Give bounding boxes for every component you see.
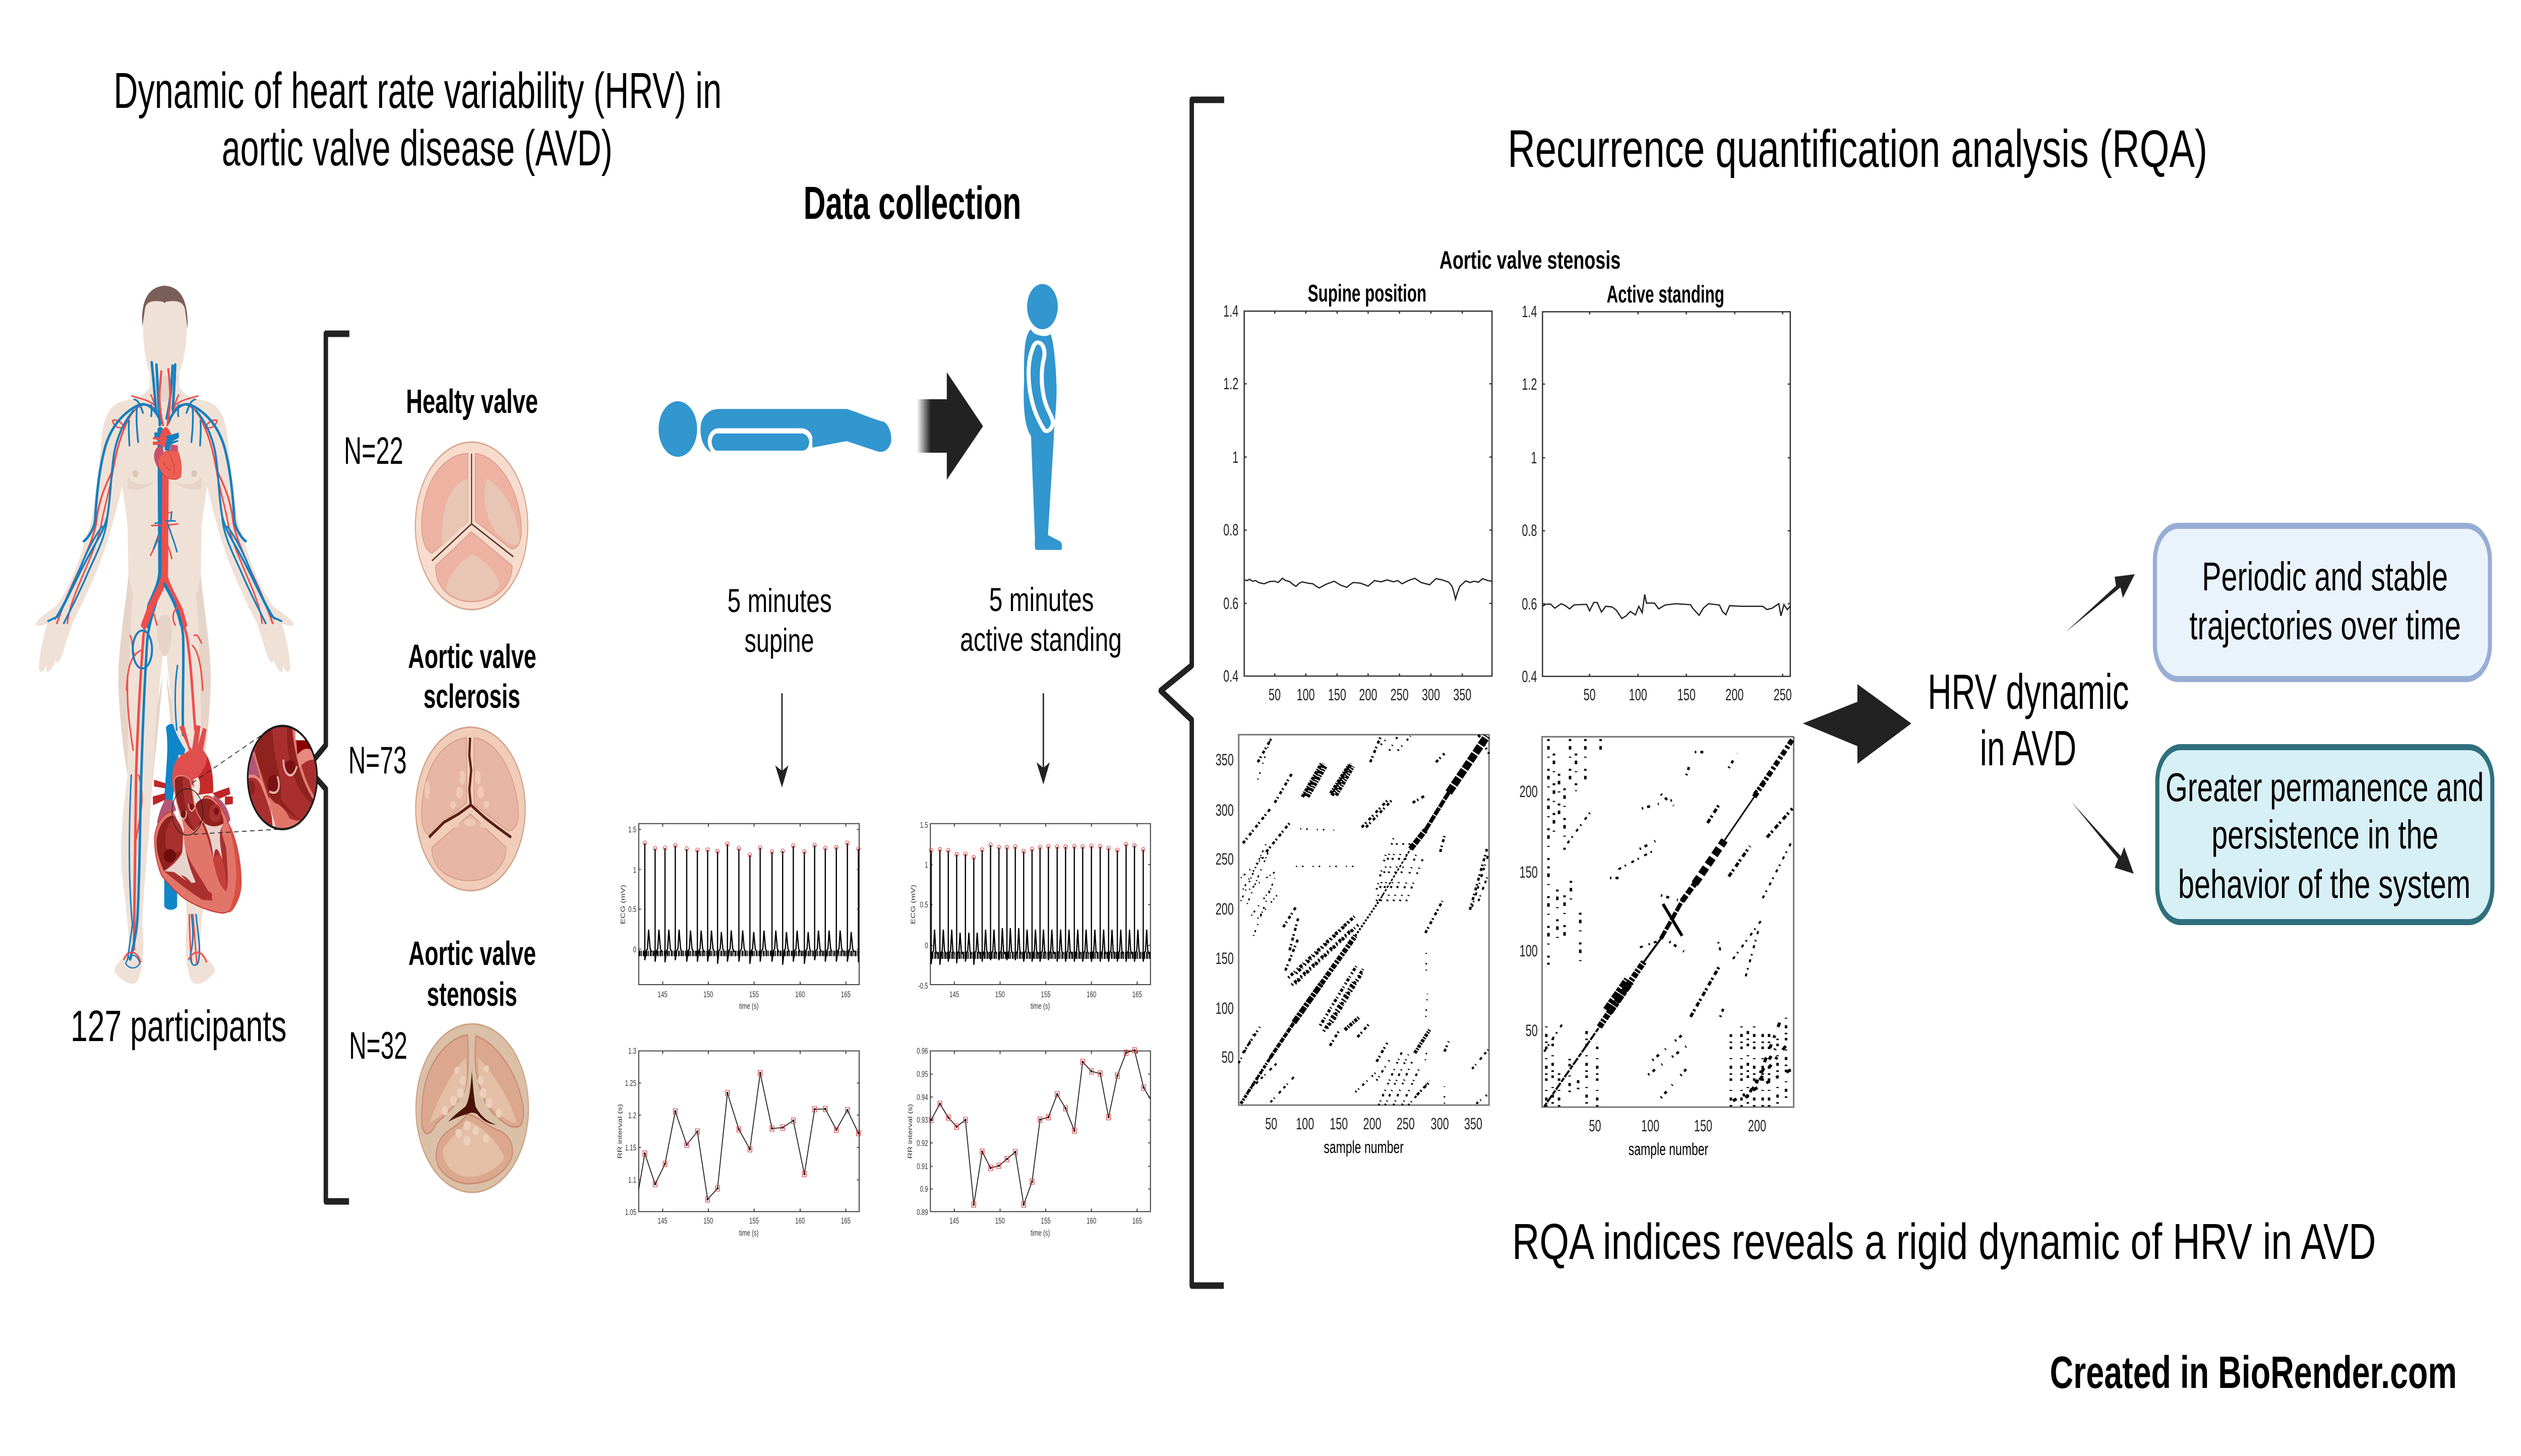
icon: standing person (1024, 284, 1062, 550)
chart: RR time series, active standing: 1 (1531, 449, 1537, 467)
icon: healthy valve (415, 442, 528, 610)
chart: RR time series, supine (1223, 302, 1492, 704)
chart: recurrence plot, active standing: sample number (1629, 1140, 1708, 1159)
chart: recurrence plot, active standing: 50 (1589, 1117, 1601, 1135)
arrow: supine to standing (917, 372, 983, 480)
chart: RR interval active standing: 0.89 (917, 1208, 928, 1218)
chart: RR time series, supine: 200 (1359, 686, 1377, 704)
chart: RR interval active standing: RR interval (s) (907, 1104, 914, 1159)
icon: aortic valve magnified view (247, 724, 319, 832)
chart: RR time series, active standing: 100 (1629, 686, 1647, 704)
label: 5 minutes supine (728, 582, 832, 659)
chart: recurrence plot, active standing: 100 (1520, 942, 1538, 960)
illustration: sectioned heart (153, 724, 280, 913)
chart: recurrence plot, supine: 350 (1464, 1115, 1482, 1133)
heading: healthy valve: Healty valve (406, 383, 538, 420)
chart: ECG active standing: 1 (925, 861, 928, 870)
chart: RR interval supine: 150 (703, 1217, 713, 1226)
chart: RR interval supine: 160 (795, 1217, 805, 1226)
chart: recurrence plot, supine (1216, 735, 1489, 1157)
chart: RR interval supine: 1.2 (628, 1111, 636, 1121)
heading: active standing: Active standing (1606, 281, 1724, 308)
icon: small heart in chest (153, 427, 182, 479)
chart: ECG active standing: 1.5 (920, 821, 928, 830)
label: HRV dynamic in AVD (1928, 664, 2129, 776)
leg vessels (124, 576, 206, 968)
title: dynamic of HRV in AVD: Dynamic of heart rate variability (HRV) in (113, 63, 722, 119)
arrow: RQA to HRV dynamic (1803, 684, 1911, 764)
chart: recurrence plot, supine: 100 (1296, 1115, 1314, 1133)
chart: recurrence plot, supine: 300 (1431, 1115, 1449, 1133)
arrow: to periodic trajectories (2066, 574, 2135, 632)
chart: ECG active standing: 165 (1132, 990, 1142, 1000)
vessels: upper body arteries and veins (48, 362, 281, 625)
chart: RR interval active standing: 0.93 (917, 1116, 928, 1125)
chart: RR interval active standing: 0.96 (917, 1047, 928, 1056)
label: N=73: N=73 (348, 739, 407, 781)
label: 5 minutes active standing: 5 minutes (989, 581, 1094, 618)
panel: greater permanence and persistence: Greater permanence and (2166, 765, 2484, 810)
heading: supine position: Supine position (1308, 280, 1426, 307)
label: 5 minutes active standing: active standing (960, 621, 1122, 658)
heading: aortic valve stenosis (408, 935, 536, 1013)
arrow: supine down to ECG (775, 693, 789, 787)
chart: recurrence plot, active standing: 200 (1520, 782, 1538, 801)
illustration: human body with circulatory system (35, 286, 294, 984)
chart: RR interval active standing: 155 (1041, 1217, 1051, 1226)
chart: recurrence plot, active standing: 100 (1641, 1117, 1659, 1135)
chart: recurrence plot, supine: 200 (1363, 1115, 1382, 1133)
chart: RR interval active standing: 0.9 (920, 1185, 928, 1194)
panel: periodic and stable trajectories (2155, 526, 2490, 679)
heading: aortic valve stenosis: stenosis (427, 976, 517, 1013)
label: 5 minutes supine: 5 minutes (728, 582, 832, 619)
chart: RR time series, supine: 0.8 (1223, 521, 1238, 539)
chart: recurrence plot, active standing: 200 (1748, 1117, 1766, 1135)
chart: ECG supine: ECG (mV) (620, 885, 627, 924)
chart: RR interval active standing (907, 1047, 1151, 1238)
chart: RR interval active standing: 0.95 (917, 1070, 928, 1079)
chart: RR interval supine: 1.1 (628, 1176, 636, 1185)
panel: periodic and stable trajectories: trajectories over time (2189, 603, 2461, 648)
chart: recurrence plot, supine: 300 (1216, 801, 1234, 819)
label: credit: Created in BioRender.com (2050, 1347, 2457, 1398)
chart: ECG active standing: 150 (995, 990, 1005, 1000)
arrow: to greater permanence (2072, 802, 2134, 874)
label: 5 minutes active standing (960, 581, 1122, 658)
chart: ECG active standing: 160 (1087, 990, 1096, 1000)
chart: recurrence plot, supine: 250 (1216, 850, 1234, 868)
icon: supine person (658, 401, 891, 457)
chart: RR interval active standing: 150 (995, 1217, 1005, 1226)
icon: stenotic valve (416, 1024, 528, 1192)
chart: RR interval active standing: 160 (1087, 1217, 1096, 1226)
chart: recurrence plot, supine: 50 (1265, 1115, 1277, 1133)
chart: recurrence plot, supine: sample number (1324, 1138, 1404, 1157)
chart: RR time series, active standing: 0.4 (1522, 668, 1537, 686)
title: recurrence quantification analysis: Recurrence quantification analysis (RQA) (1508, 119, 2207, 178)
chart: RR time series, supine: 250 (1391, 686, 1409, 704)
chart: recurrence plot, supine: 100 (1216, 999, 1234, 1017)
label: participants: 127 participants (71, 1002, 286, 1051)
chart: RR time series, supine: 1.2 (1223, 375, 1238, 393)
chart: RR interval supine: 1.3 (628, 1047, 636, 1056)
heading: aortic valve stenosis: Aortic valve (408, 935, 536, 973)
chart: ECG active standing: 0 (925, 941, 928, 951)
chart: recurrence plot, supine: 250 (1397, 1115, 1415, 1133)
heading: aortic valve sclerosis: Aortic valve (408, 638, 536, 676)
chart: RR interval supine: 165 (841, 1217, 851, 1226)
chart: RR time series, active standing: 150 (1677, 686, 1696, 704)
chart: ECG active standing: ECG (mV) (910, 885, 917, 924)
chart: RR interval active standing: time (s) (1031, 1229, 1050, 1238)
chart: ECG active standing (910, 821, 1151, 1011)
chart: RR time series, supine: 300 (1422, 686, 1440, 704)
chart: RR time series, active standing: 250 (1774, 686, 1792, 704)
chart: RR interval supine: time (s) (739, 1229, 758, 1238)
heading: aortic valve stenosis plots: Aortic valve stenosis (1439, 246, 1620, 275)
icon: sclerotic valve (415, 727, 525, 891)
panel: greater permanence and persistence: persistence in the (2211, 813, 2438, 858)
panel: periodic and stable trajectories: Periodic and stable (2202, 555, 2448, 599)
chart: ECG supine: 0 (633, 945, 636, 955)
chart: RR interval active standing: 0.92 (917, 1139, 928, 1148)
chart: ECG supine: 145 (658, 990, 668, 1000)
chart: recurrence plot, supine: 150 (1216, 949, 1234, 967)
label: RQA conclusion: RQA indices reveals a rigid dynamic of HRV in AVD (1512, 1214, 2376, 1270)
panel: greater permanence and persistence (2157, 747, 2492, 922)
chart: RR interval active standing: 145 (949, 1217, 959, 1226)
chart: RR time series, active standing: 200 (1725, 686, 1744, 704)
arrow: standing down to ECG (1037, 693, 1050, 784)
chart: ECG supine: 155 (749, 990, 759, 1000)
chart: RR time series, supine: 0.6 (1223, 594, 1238, 613)
chart: ECG active standing: -0.5 (918, 982, 928, 991)
chart: RR interval active standing: 165 (1132, 1217, 1142, 1226)
chart: ECG active standing: 145 (949, 990, 959, 1000)
chart: ECG supine: 165 (841, 990, 851, 1000)
chart: RR time series, supine: 1 (1232, 448, 1238, 466)
label: N=22: N=22 (344, 429, 403, 472)
chart: RR interval active standing: 0.94 (917, 1093, 928, 1103)
chart: recurrence plot, active standing: 150 (1520, 863, 1538, 881)
chart: RR time series, supine: 50 (1269, 686, 1281, 704)
chart: ECG supine (620, 824, 859, 1011)
heading: data collection: Data collection (804, 177, 1021, 229)
chart: recurrence plot, supine: 350 (1216, 751, 1234, 769)
chart: RR time series, active standing: 1.4 (1522, 302, 1537, 321)
chart: RR interval supine: RR interval (s) (617, 1104, 624, 1159)
chart: recurrence plot, supine: 150 (1330, 1115, 1348, 1133)
chart: recurrence plot, supine: 200 (1216, 900, 1234, 918)
label: N=32: N=32 (349, 1024, 407, 1067)
chart: ECG supine: 0.5 (628, 905, 636, 915)
chart: RR time series, supine: 150 (1328, 686, 1346, 704)
chart: RR interval supine: 1.25 (625, 1079, 636, 1088)
chart: RR interval supine: 1.05 (625, 1208, 636, 1218)
chart: RR time series, active standing: 1.2 (1522, 375, 1537, 393)
chart: RR time series, active standing (1522, 302, 1792, 704)
chart: ECG supine: 150 (703, 990, 713, 1000)
heading: aortic valve sclerosis (408, 638, 536, 715)
chart: RR interval supine: 1.15 (625, 1143, 636, 1153)
callout: dashed guide lines and loop (172, 736, 280, 835)
chart: RR time series, supine: 350 (1453, 686, 1471, 704)
chart: RR interval supine (617, 1047, 859, 1238)
chart: recurrence plot, supine: 50 (1222, 1048, 1234, 1066)
panel: greater permanence and persistence: behavior of the system (2178, 862, 2471, 907)
icon: left bracket grouping the valve types (307, 334, 349, 1201)
chart: ECG supine: time (s) (739, 1002, 758, 1011)
chart: recurrence plot, active standing (1520, 737, 1793, 1159)
chart: RR time series, active standing: 0.8 (1522, 521, 1537, 539)
chart: ECG supine: 1.5 (628, 825, 636, 835)
title: dynamic of HRV in AVD: aortic valve disease (AVD) (222, 120, 613, 176)
chart: ECG supine: 1 (633, 866, 636, 875)
icon: large bracket around RQA (1161, 100, 1224, 1286)
chart: ECG active standing: 155 (1041, 990, 1051, 1000)
chart: ECG active standing: time (s) (1031, 1002, 1050, 1011)
chart: recurrence plot, active standing: 50 (1526, 1021, 1538, 1040)
chart: ECG active standing: 0.5 (920, 900, 928, 910)
chart: RR interval supine: 155 (749, 1217, 759, 1226)
title: dynamic of HRV in AVD (113, 63, 722, 176)
chart: RR interval supine: 145 (658, 1217, 668, 1226)
chart: RR time series, supine: 1.4 (1223, 302, 1238, 320)
chart: RR interval active standing: 0.91 (917, 1162, 928, 1172)
label: HRV dynamic in AVD: HRV dynamic (1928, 664, 2129, 719)
label: HRV dynamic in AVD: in AVD (1980, 720, 2076, 776)
chart: RR time series, active standing: 0.6 (1522, 595, 1537, 613)
label: 5 minutes supine: supine (745, 622, 814, 659)
chart: recurrence plot, active standing: 150 (1694, 1117, 1712, 1135)
chart: RR time series, supine: 0.4 (1223, 667, 1238, 685)
heading: aortic valve sclerosis: sclerosis (424, 678, 520, 715)
chart: RR time series, supine: 100 (1297, 686, 1315, 704)
chart: RR time series, active standing: 50 (1584, 686, 1596, 704)
chart: ECG supine: 160 (795, 990, 805, 1000)
